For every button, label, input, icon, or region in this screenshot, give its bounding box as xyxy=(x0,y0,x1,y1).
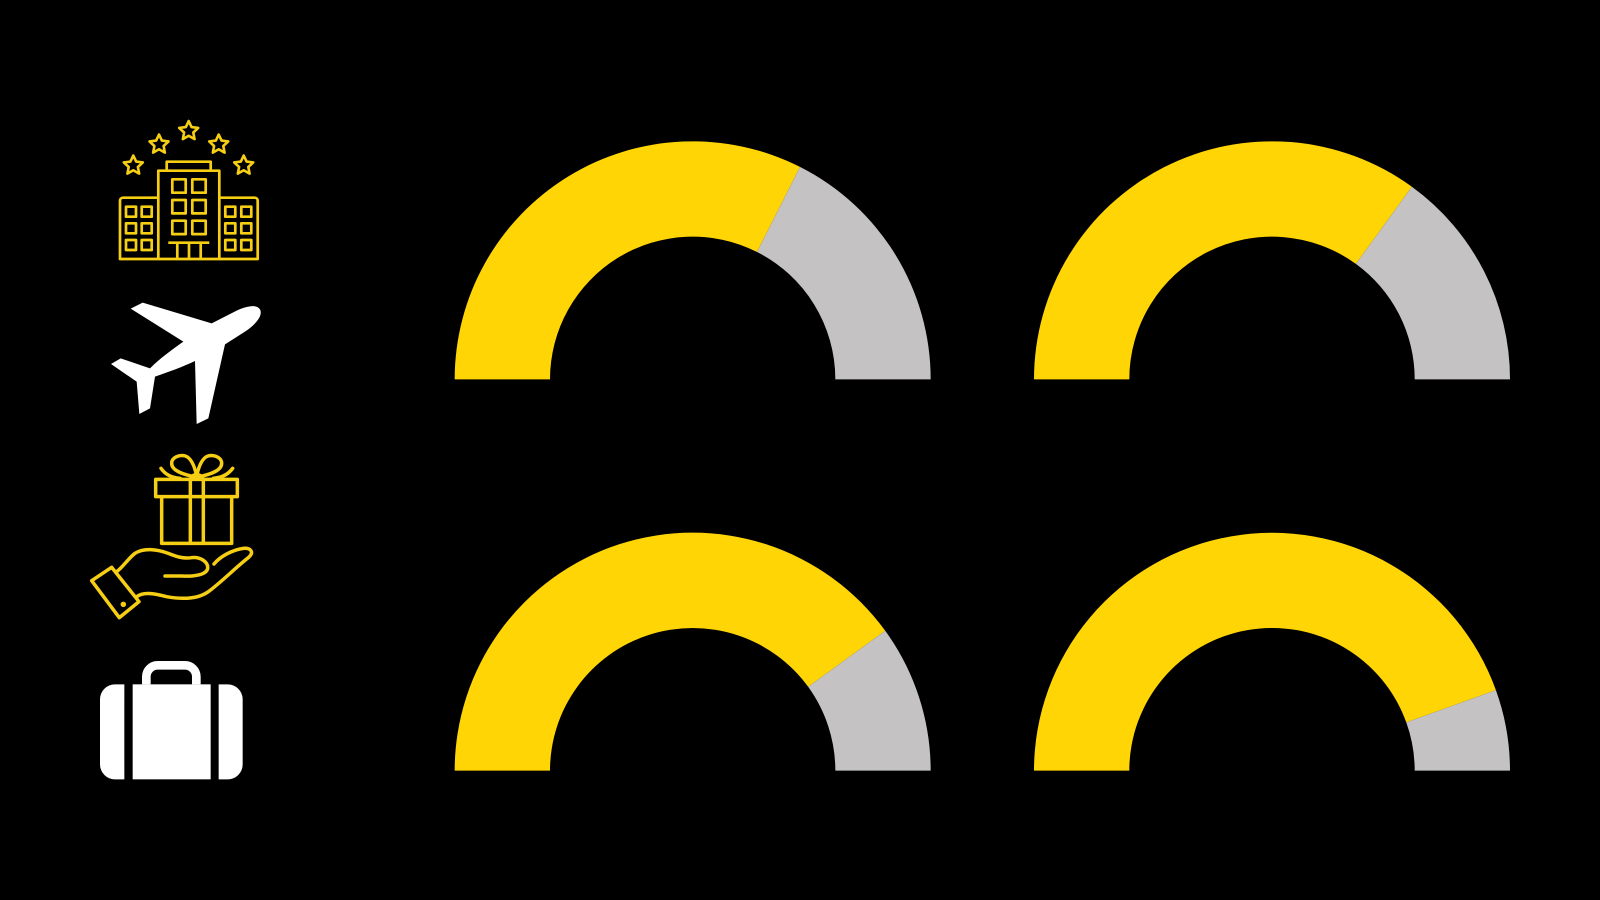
gauge chart: bottom left xyxy=(455,533,931,771)
icon: hotel with five stars xyxy=(120,121,258,259)
icon part: hand and cuff xyxy=(92,548,251,618)
gauge chart: top right xyxy=(1034,141,1510,379)
icon: suitcase xyxy=(100,665,243,779)
icon part: stars xyxy=(124,121,253,174)
gauge chart: bottom right xyxy=(1034,533,1510,771)
icon: hand holding gift xyxy=(92,456,251,618)
gauge chart: top left xyxy=(455,141,931,379)
icon part: building xyxy=(120,162,258,259)
icon part: gift box xyxy=(156,456,237,543)
icon: airplane xyxy=(111,303,261,424)
